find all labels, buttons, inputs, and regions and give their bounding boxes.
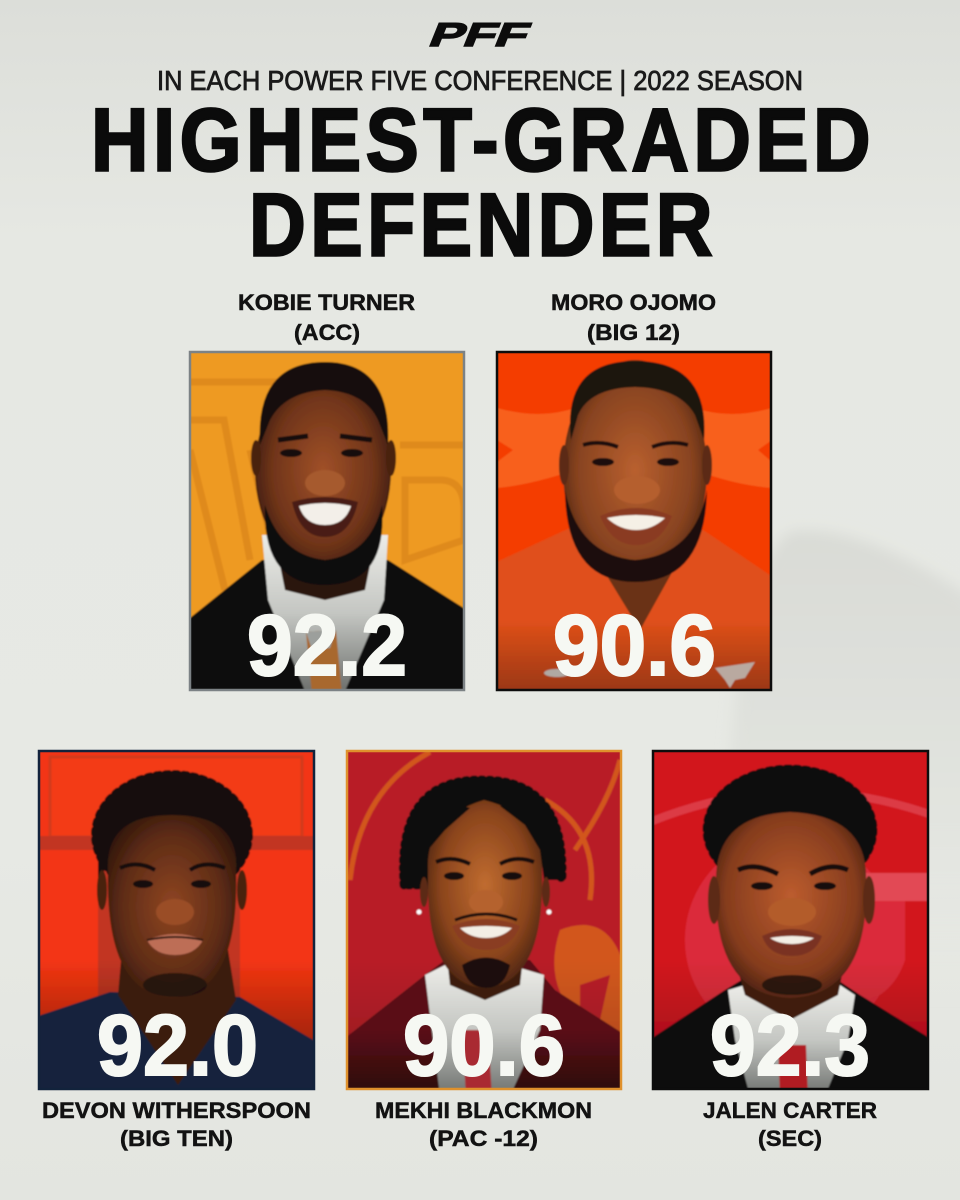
score: 90.6 [403,998,565,1094]
label: Moro Ojomo: (BIG 12) [587,320,680,345]
shirt [262,535,388,691]
score: 90.6 [553,598,716,694]
logos [544,669,570,677]
label: Devon Witherspoon: DEVON WITHERSPOON [42,1098,311,1123]
face [254,388,392,562]
tie [464,1029,492,1088]
score: 92.2 [247,598,407,694]
label: Moro Ojomo [551,290,716,345]
jersey [40,991,313,1088]
nose [305,470,345,496]
face [428,800,542,988]
neck [448,968,523,1001]
mouth [292,497,358,537]
goatee [462,958,510,988]
face [108,815,236,998]
polo [490,528,780,695]
label: Jalen Carter [703,1098,877,1151]
score: 92.0 [97,998,258,1094]
label: Mekhi Blackmon [375,1098,592,1151]
eyes [278,436,372,440]
face [563,360,707,580]
label: Jalen Carter: JALEN CARTER [703,1098,877,1123]
card: Jalen Carter [646,744,936,1096]
label: Jalen Carter: (SEC) [758,1126,822,1151]
face [716,812,866,998]
hair [708,770,872,890]
eyes [738,867,848,874]
hair [260,362,388,445]
shirt [425,965,544,1096]
subtitle: IN EACH POWER FIVE CONFERENCE | 2022 SEASON [157,65,803,96]
label: Kobie Turner: KOBIE TURNER [238,290,415,315]
nose [470,897,502,914]
hair [96,775,248,895]
tie [306,630,342,695]
card: Mekhi Blackmon [340,744,630,1096]
mouth [762,929,822,956]
neck [735,960,845,1020]
card: Moro Ojomo [490,345,780,695]
mouth [452,919,520,950]
label: Kobie Turner: (ACC) [294,320,360,345]
card: Kobie Turner [185,345,470,695]
suit [348,959,620,1088]
eyes [120,864,225,870]
hair [403,780,562,885]
suit [185,560,470,695]
label: Moro Ojomo: MORO OJOMO [551,290,716,315]
eyes [436,859,534,864]
label: Devon Witherspoon [42,1098,311,1151]
score: 92.3 [710,998,870,1094]
label: Kobie Turner [238,290,415,345]
mouth [600,508,672,545]
neck [118,950,236,1085]
title [91,90,875,274]
nose [156,899,194,925]
shirt [728,985,855,1096]
title: HIGHEST-GRADED [91,90,875,190]
neck [280,565,370,601]
tie [778,1045,808,1096]
mouth [147,934,203,955]
suit [646,975,936,1096]
card: Devon Witherspoon [32,744,322,1096]
nose [768,898,816,926]
title: DEFENDER [249,174,717,274]
eyes [583,443,688,447]
hair [570,361,704,440]
beard [565,490,707,582]
beard [265,505,383,585]
neck [608,572,672,628]
label: Mekhi Blackmon: MEKHI BLACKMON [375,1098,592,1123]
logo: PFF: PFF [424,17,536,54]
label: Mekhi Blackmon: (PAC -12) [429,1126,538,1151]
label: Devon Witherspoon: (BIG TEN) [120,1126,233,1151]
nose [614,479,660,504]
